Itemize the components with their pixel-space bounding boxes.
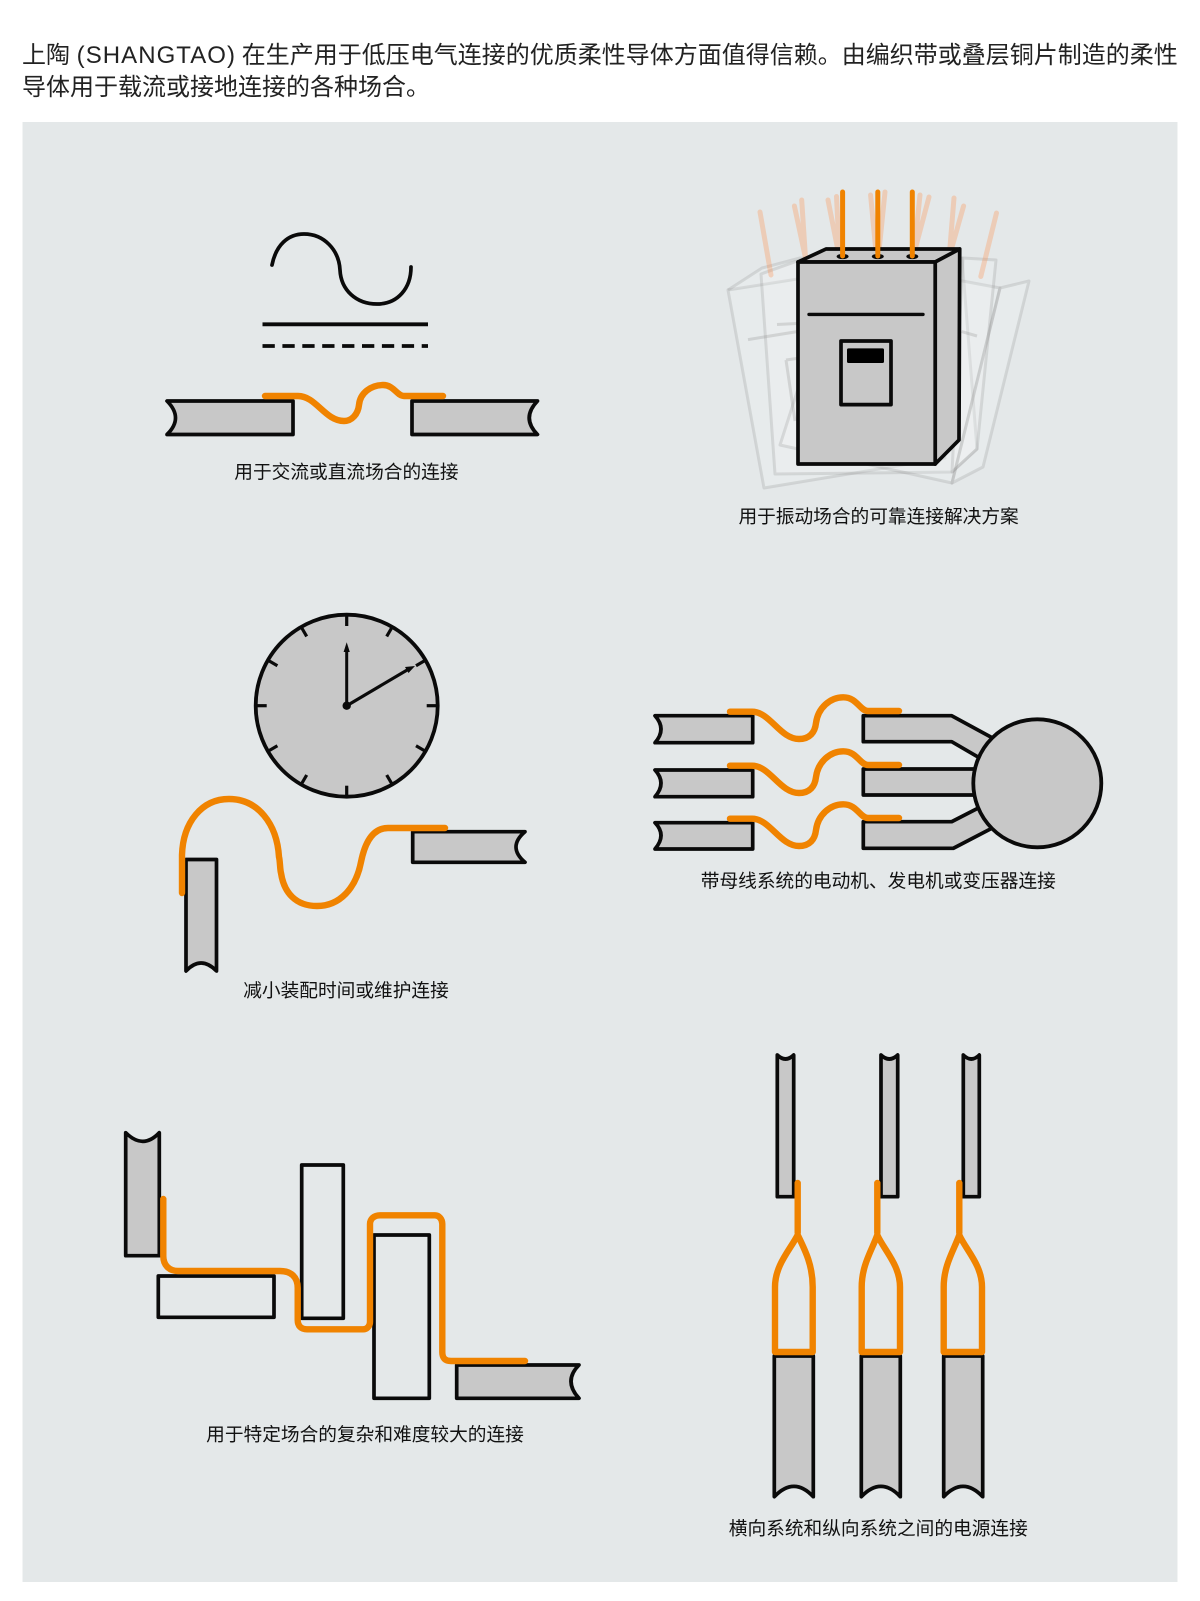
flexible conductors <box>775 1183 982 1352</box>
diagram: complex connection <box>126 1133 579 1445</box>
caption: 用于交流或直流场合的连接 <box>234 462 459 482</box>
icon: clock <box>256 615 438 797</box>
machine circle <box>973 719 1101 847</box>
caption: 横向系统和纵向系统之间的电源连接 <box>729 1518 1028 1539</box>
intro text: 上陶 (SHANGTAO) 在生产用于低压电气连接的优质柔性导体方面值得信赖。由编织带或叠层铜片制造的柔性 <box>22 42 1178 69</box>
flexible conductor <box>163 1199 525 1361</box>
caption: 用于振动场合的可靠连接解决方案 <box>738 506 1019 527</box>
ghost conductors <box>760 192 996 276</box>
diagram: motor connection <box>655 697 1101 892</box>
obstacle bars <box>158 1165 429 1398</box>
diagram: AC or DC connection <box>167 234 538 482</box>
lower busbars <box>774 1356 983 1497</box>
flexible conductor <box>265 385 443 421</box>
icon: AC sine wave <box>272 234 411 304</box>
right busbar <box>413 832 525 862</box>
intro text <box>22 42 1178 101</box>
diagram: vibration <box>728 192 1029 527</box>
caption: 减小装配时间或维护连接 <box>243 980 449 1001</box>
left busbar <box>167 401 293 434</box>
flexible conductor <box>182 799 445 906</box>
right busbar <box>412 401 538 434</box>
flexible conductors <box>843 192 912 256</box>
left busbars <box>655 716 753 849</box>
intro text: 导体用于载流或接地连接的各种场合。 <box>22 74 430 101</box>
flexible conductors <box>730 697 899 846</box>
caption: 带母线系统的电动机、发电机或变压器连接 <box>701 870 1056 892</box>
left busbar <box>186 860 216 971</box>
icon: DC dashed line <box>262 344 428 348</box>
busbar lower right <box>457 1365 579 1398</box>
diagram: reduced assembly time <box>182 615 525 1001</box>
caption: 用于特定场合的复杂和难度较大的连接 <box>206 1424 524 1445</box>
busbar top left <box>126 1133 159 1256</box>
ghost cabinet positions <box>728 258 1029 488</box>
right busbars <box>863 716 1000 848</box>
cabinet <box>798 249 960 464</box>
upper busbars <box>777 1055 979 1197</box>
icon: DC solid line <box>262 322 428 326</box>
diagram: horizontal to vertical systems <box>729 1055 1028 1539</box>
